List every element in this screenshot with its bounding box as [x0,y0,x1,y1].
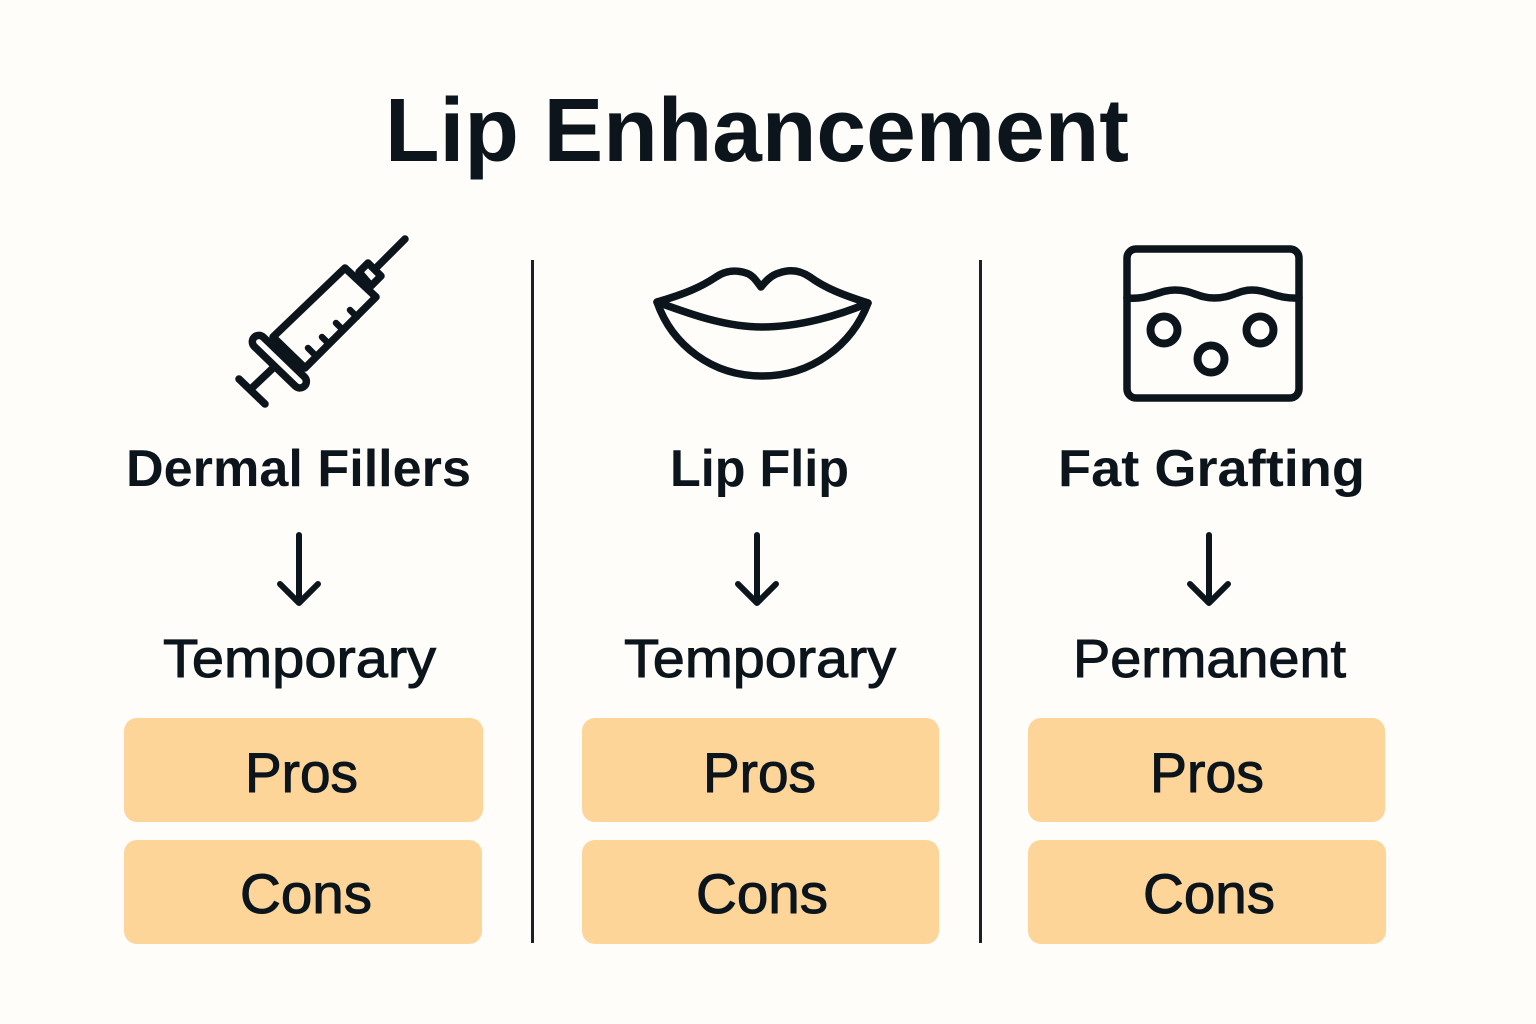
arrow: lip flip to temporary [738,535,776,603]
box: cons: Cons [240,862,372,925]
label: temporary: Temporary [163,629,436,689]
icon: syringe [239,239,405,404]
box: cons [582,840,939,944]
label: permanent: Permanent [1073,629,1346,689]
heading: fat grafting: Fat Grafting [1058,440,1365,498]
heading: dermal fillers: Dermal Fillers [126,440,471,498]
icon: fat tissue [1127,249,1299,398]
heading: lip flip: Lip Flip [670,440,849,498]
box: pros [124,718,483,822]
box: cons [124,840,482,944]
icon: lips [657,271,868,376]
box: cons: Cons [1143,862,1275,925]
box: pros: Pros [245,741,358,804]
box: pros: Pros [1150,741,1264,804]
box: pros [582,718,939,822]
arrow: fat grafting to permanent [1190,535,1228,603]
box: pros: Pros [703,741,816,804]
panel: fat grafting [1028,249,1386,944]
divider: left [531,260,534,943]
box: cons: Cons [696,862,828,925]
title: Lip Enhancement [385,81,1129,181]
box: cons [1028,840,1386,944]
divider: right [979,260,982,943]
panel: dermal fillers [124,239,483,944]
arrow: dermal fillers to temporary [280,535,318,603]
box: pros [1028,718,1385,822]
label: temporary: Temporary [624,629,896,689]
panel: lip flip [582,271,939,944]
